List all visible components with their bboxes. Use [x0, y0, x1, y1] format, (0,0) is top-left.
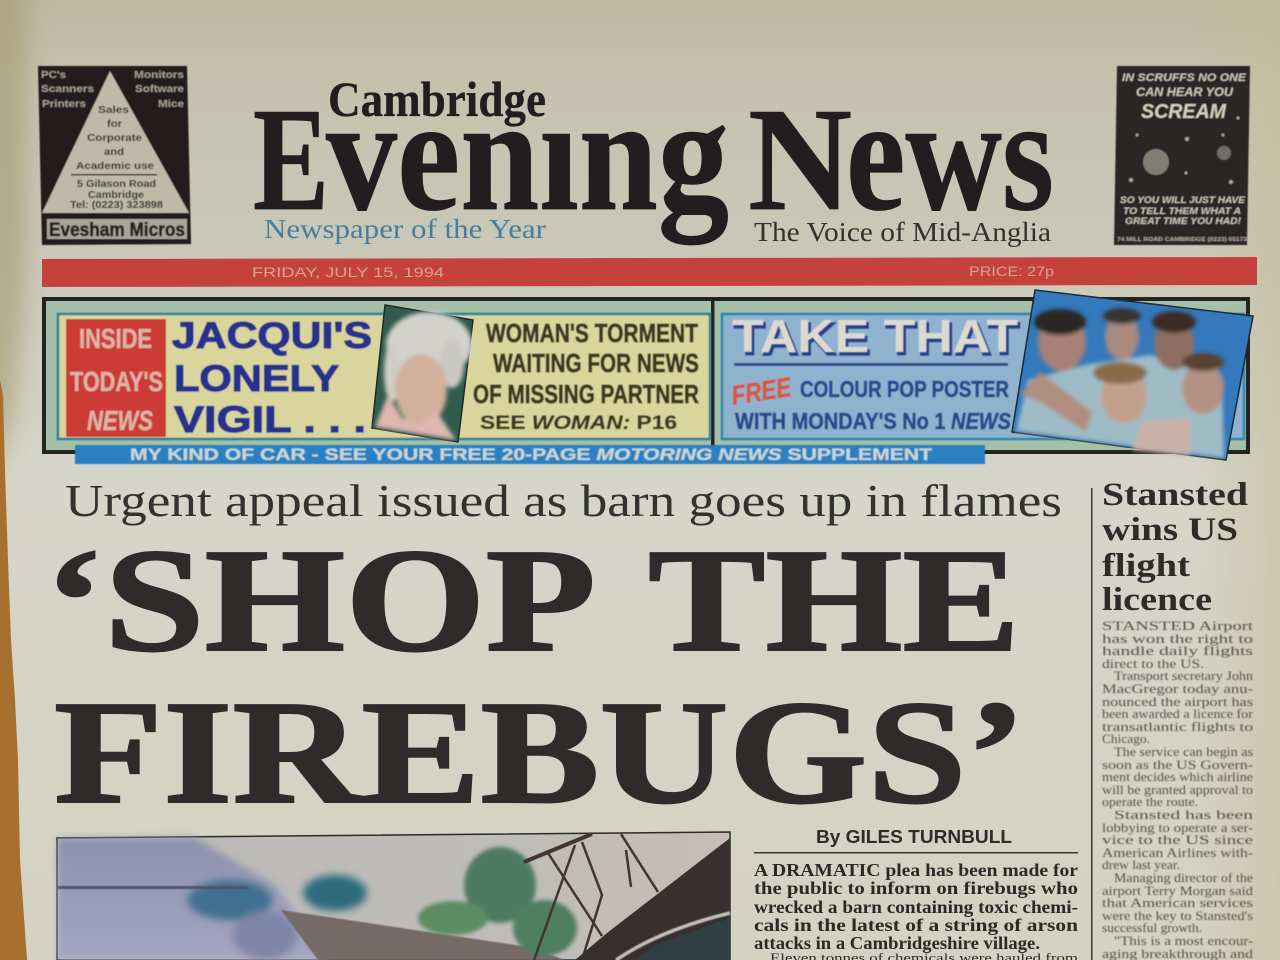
advert: space scream: CAN HEAR YOU — [1136, 85, 1233, 99]
side story body text: Chicago. — [1102, 732, 1150, 746]
masthead: newspaper name: ews — [846, 65, 1054, 245]
advert: space scream: TO TELL THEM WHAT A — [1123, 206, 1241, 216]
panel: Jacqui's lonely vigil: JACQUI'S — [172, 315, 372, 356]
side story headline: wins US — [1102, 512, 1238, 548]
side story body text: ment decides which airline — [1102, 770, 1254, 784]
masthead: newspaper name: vening — [326, 65, 729, 245]
side story body text: transatlantic flights to — [1102, 720, 1253, 734]
side story body text: Transport secretary John — [1114, 669, 1254, 683]
advert: Evesham Micros: Printers — [42, 99, 87, 110]
main story intro text: cals in the latest of a string of arson — [754, 915, 1078, 935]
side story body text: successful growth. — [1102, 921, 1202, 935]
advert: Evesham Micros: for — [107, 119, 122, 130]
advert: Evesham Micros: Corporate — [87, 133, 142, 144]
photo: elderly woman — [372, 305, 473, 442]
advert: Evesham Micros: Cambridge — [88, 190, 144, 201]
date and price bar: PRICE: 27p — [969, 263, 1054, 279]
masthead: newspaper name — [253, 65, 1054, 245]
side story body text: airport Terry Morgan said — [1102, 884, 1254, 898]
main story intro text: the public to inform on firebugs who — [754, 878, 1078, 898]
masthead: newspaper name: N — [748, 78, 852, 242]
advert: space scream — [1114, 66, 1250, 245]
masthead: newspaper name: Cambridge — [328, 71, 546, 127]
main headline: THE — [648, 519, 1020, 683]
advert: Evesham Micros: and — [104, 147, 124, 158]
panel: Jacqui's lonely vigil: NEWS — [87, 405, 153, 436]
panel: Jacqui's lonely vigil: LONELY — [174, 358, 339, 399]
advert: space scream: GREAT TIME YOU HAD! — [1125, 216, 1241, 226]
side story body text: direct to the US. — [1102, 657, 1204, 671]
panel: Take That poster — [722, 310, 1244, 439]
side story body text: The service can begin as — [1114, 745, 1253, 759]
side story body text: handle daily flights — [1102, 644, 1253, 658]
advert: Evesham Micros: 5 Gilason Road — [77, 179, 156, 190]
side story body text: "This is a most encour- — [1114, 934, 1253, 948]
side story headline: flight — [1102, 548, 1190, 584]
side story body text: operate the route. — [1102, 795, 1198, 809]
side story body text: been awarded a licence for — [1102, 707, 1254, 721]
side story body text: will be granted approval to — [1102, 783, 1253, 797]
main headline: ‘SHOP — [44, 519, 596, 683]
side story body text: soon as the US Govern- — [1102, 758, 1253, 772]
panel: Jacqui's lonely vigil: SEE WOMAN: P16 — [480, 413, 677, 434]
side story body text: STANSTED Airport — [1102, 619, 1254, 633]
side story headline — [1102, 477, 1248, 618]
panel: Take That poster: TAKE THAT — [734, 313, 1020, 365]
side story body text: were the key to Stansted's — [1102, 909, 1253, 923]
tagline: The Voice of Mid-Anglia: The Voice of Mid-Anglia — [754, 217, 1051, 247]
main story intro text: wrecked a barn containing toxic chemi- — [754, 897, 1078, 917]
advert: Evesham Micros: Mice — [158, 99, 185, 110]
main story intro text: A DRAMATIC plea has been made for — [754, 860, 1078, 880]
advert: space scream: SO YOU WILL JUST HAVE — [1120, 195, 1246, 205]
side story body text: has won the right to — [1102, 632, 1253, 646]
main headline: FIREBUGS’ — [54, 671, 1026, 835]
panel: Jacqui's lonely vigil: VIGIL . . . — [174, 399, 366, 440]
side story headline: Stansted — [1102, 477, 1248, 513]
side story body text: vice to the US since — [1102, 833, 1254, 847]
side story body text: lobbying to operate a ser- — [1102, 821, 1253, 835]
side story body text: that American services — [1102, 896, 1253, 910]
side story body text: nounced the airport has — [1102, 695, 1253, 709]
date and price bar: FRIDAY, JULY 15, 1994 — [252, 264, 444, 280]
panel: Jacqui's lonely vigil: WOMAN'S TORMENT — [486, 318, 698, 348]
panel: Take That poster: FREE — [729, 372, 794, 411]
advert: space scream: SCREAM — [1141, 101, 1227, 123]
advert: Evesham Micros: Software — [135, 84, 185, 95]
advert: Evesham Micros — [38, 66, 191, 245]
side story body text: Stansted has been — [1114, 808, 1254, 822]
side story body text: Managing director of the — [1114, 871, 1254, 885]
supplement strip: MY KIND OF CAR - SEE YOUR FREE 20-PAGE MOTORING NEWS SUPPLEMENT — [130, 445, 933, 464]
photo: burnt barn — [57, 832, 730, 960]
advert: space scream: 74 MILL ROAD CAMBRIDGE (0223) 65173 — [1117, 237, 1247, 243]
panel: Jacqui's lonely vigil: OF MISSING PARTNER — [473, 379, 699, 409]
advert: Evesham Micros: PC's — [41, 70, 66, 81]
advert: Evesham Micros: Evesham Micros — [49, 220, 185, 241]
panel: Take That poster: WITH MONDAY'S No 1 NEWS — [735, 408, 1012, 434]
advert: Evesham Micros: Tel: (0223) 323898 — [70, 200, 163, 211]
teaser banner — [44, 290, 1253, 464]
byline: By GILES TURNBULL — [816, 827, 1012, 847]
panel: Take That poster: COLOUR POP POSTER — [800, 376, 1009, 402]
masthead: newspaper name: E — [253, 78, 329, 242]
panel: Jacqui's lonely vigil — [58, 314, 710, 440]
side story body text: drew last year. — [1102, 858, 1180, 872]
advert: Evesham Micros: Monitors — [134, 70, 185, 81]
panel: Take That poster: TAKE THAT — [732, 310, 1018, 362]
side story headline: licence — [1102, 582, 1212, 618]
photo: Take That band — [1012, 290, 1253, 460]
strapline headline: Urgent appeal issued as barn goes up in flames — [65, 475, 1062, 526]
date and price bar — [42, 257, 1257, 287]
advert: Evesham Micros: Academic use — [76, 161, 154, 172]
advert: space scream: IN SCRUFFS NO ONE — [1122, 72, 1247, 84]
side story body text — [1102, 619, 1254, 960]
main headline — [44, 519, 1026, 835]
column rule — [1091, 488, 1092, 960]
advert: Evesham Micros: Scanners — [41, 84, 95, 95]
tagline: Newspaper of the Year: Newspaper of the Year — [264, 214, 546, 244]
advert: Evesham Micros: Sales — [98, 105, 130, 116]
side story body text: MacGregor today anu- — [1102, 682, 1253, 696]
side story body text: American Airlines with- — [1102, 846, 1253, 860]
panel: Jacqui's lonely vigil: INSIDE — [79, 323, 152, 354]
panel: Jacqui's lonely vigil: TODAY'S — [70, 366, 163, 397]
panel: Jacqui's lonely vigil: WAITING FOR NEWS — [493, 348, 699, 378]
main story intro text: attacks in a Cambridgeshire village. — [754, 933, 1040, 953]
main story intro text — [754, 860, 1078, 960]
